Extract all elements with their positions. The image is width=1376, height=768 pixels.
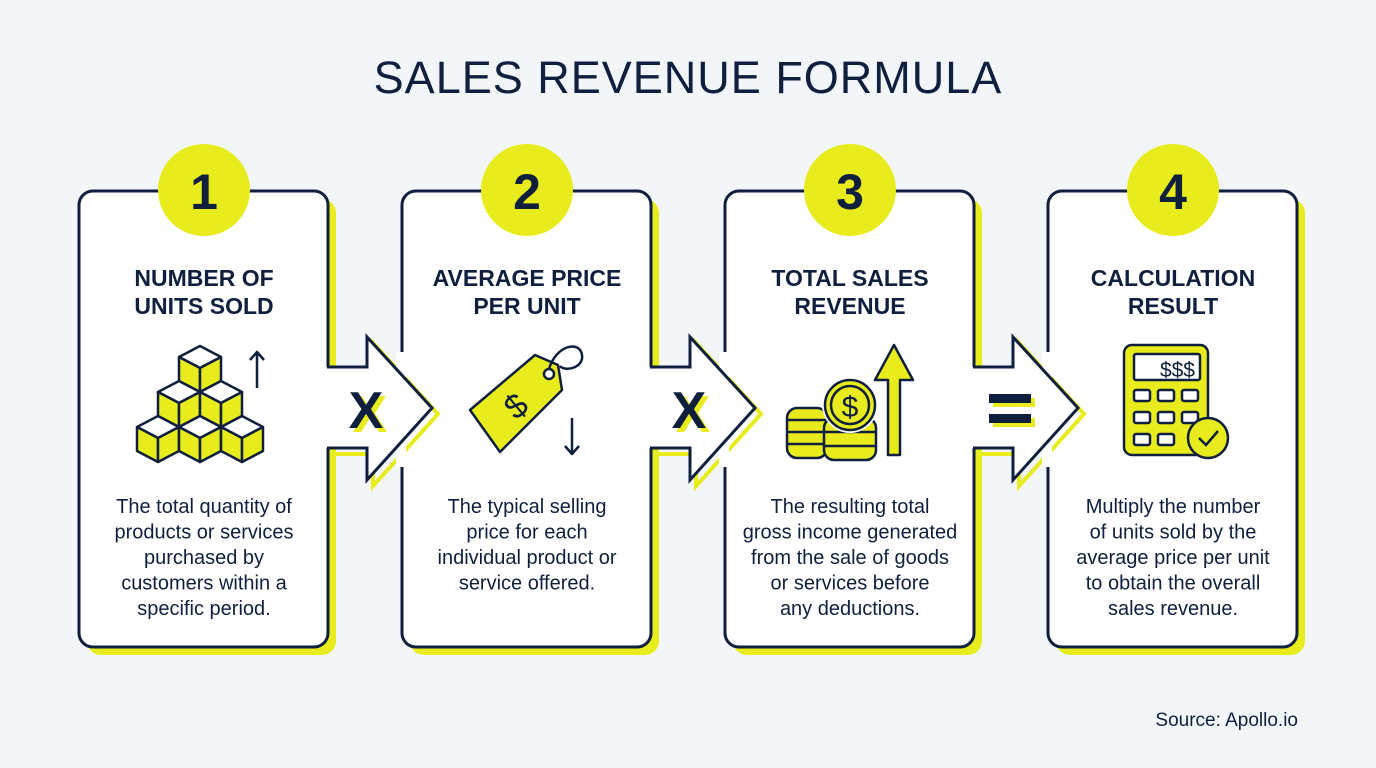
text 4: of units sold by the bbox=[1090, 522, 1256, 544]
text 1: The total quantity of bbox=[116, 496, 292, 518]
symbol x: X bbox=[676, 386, 711, 444]
text 4: Multiply the number bbox=[1086, 496, 1261, 518]
text 3: gross income generated bbox=[743, 522, 957, 544]
icon: cubes bbox=[137, 346, 264, 462]
symbol x: X bbox=[672, 382, 707, 440]
text 4: sales revenue. bbox=[1108, 598, 1238, 620]
text 3: The resulting total bbox=[771, 496, 929, 518]
panel: card 1 bbox=[79, 144, 336, 655]
badge 2 bbox=[481, 144, 573, 236]
panel: card 3 bbox=[725, 144, 982, 655]
heading 2: AVERAGE PRICE bbox=[433, 265, 621, 291]
heading 3: TOTAL SALES bbox=[771, 265, 929, 291]
text 4: to obtain the overall bbox=[1086, 572, 1260, 594]
text 2: individual product or bbox=[438, 547, 617, 569]
text 1: purchased by bbox=[144, 547, 264, 569]
heading 3: REVENUE bbox=[794, 293, 906, 319]
icon: coins and arrow: $ bbox=[842, 391, 859, 424]
panel: card 2 bbox=[402, 144, 659, 655]
badge 2: 2 bbox=[513, 164, 541, 220]
icon: coins and arrow bbox=[787, 345, 913, 460]
symbol x: X bbox=[349, 382, 384, 440]
arrow 1: multiply bbox=[325, 337, 438, 486]
text 1: specific period. bbox=[137, 598, 271, 620]
text 2: price for each bbox=[466, 522, 588, 544]
text 4: average price per unit bbox=[1076, 547, 1270, 569]
badge 1: 1 bbox=[190, 164, 218, 220]
arrow 2: multiply bbox=[648, 337, 761, 486]
badge 4 bbox=[1127, 144, 1219, 236]
icon: price tag bbox=[470, 347, 582, 454]
text 3: from the sale of goods bbox=[751, 547, 949, 569]
text 1: products or services bbox=[115, 522, 293, 544]
heading 1: UNITS SOLD bbox=[134, 293, 274, 319]
icon: calculator: $$$ bbox=[1160, 359, 1195, 382]
badge 4: 4 bbox=[1159, 164, 1187, 220]
heading 4: CALCULATION bbox=[1091, 265, 1255, 291]
heading 2: PER UNIT bbox=[473, 293, 581, 319]
text 1: customers within a bbox=[121, 572, 288, 594]
text 3: any deductions. bbox=[780, 598, 920, 620]
badge 1 bbox=[158, 144, 250, 236]
text 3: or services before bbox=[771, 572, 929, 594]
symbol x: X bbox=[353, 386, 388, 444]
heading 4: RESULT bbox=[1128, 293, 1218, 319]
symbol equals bbox=[989, 394, 1035, 427]
panel: card 4 bbox=[1048, 144, 1305, 655]
text 2: service offered. bbox=[459, 572, 595, 594]
icon: calculator bbox=[1124, 345, 1228, 458]
badge 3 bbox=[804, 144, 896, 236]
source: Source: Apollo.io bbox=[1155, 710, 1298, 731]
arrow 3: equals bbox=[971, 337, 1084, 486]
title: SALES REVENUE FORMULA bbox=[374, 52, 1002, 103]
text 2: The typical selling bbox=[448, 496, 606, 518]
badge 3: 3 bbox=[836, 164, 864, 220]
icon: price tag: $ bbox=[497, 386, 536, 427]
heading 1: NUMBER OF bbox=[134, 265, 274, 291]
